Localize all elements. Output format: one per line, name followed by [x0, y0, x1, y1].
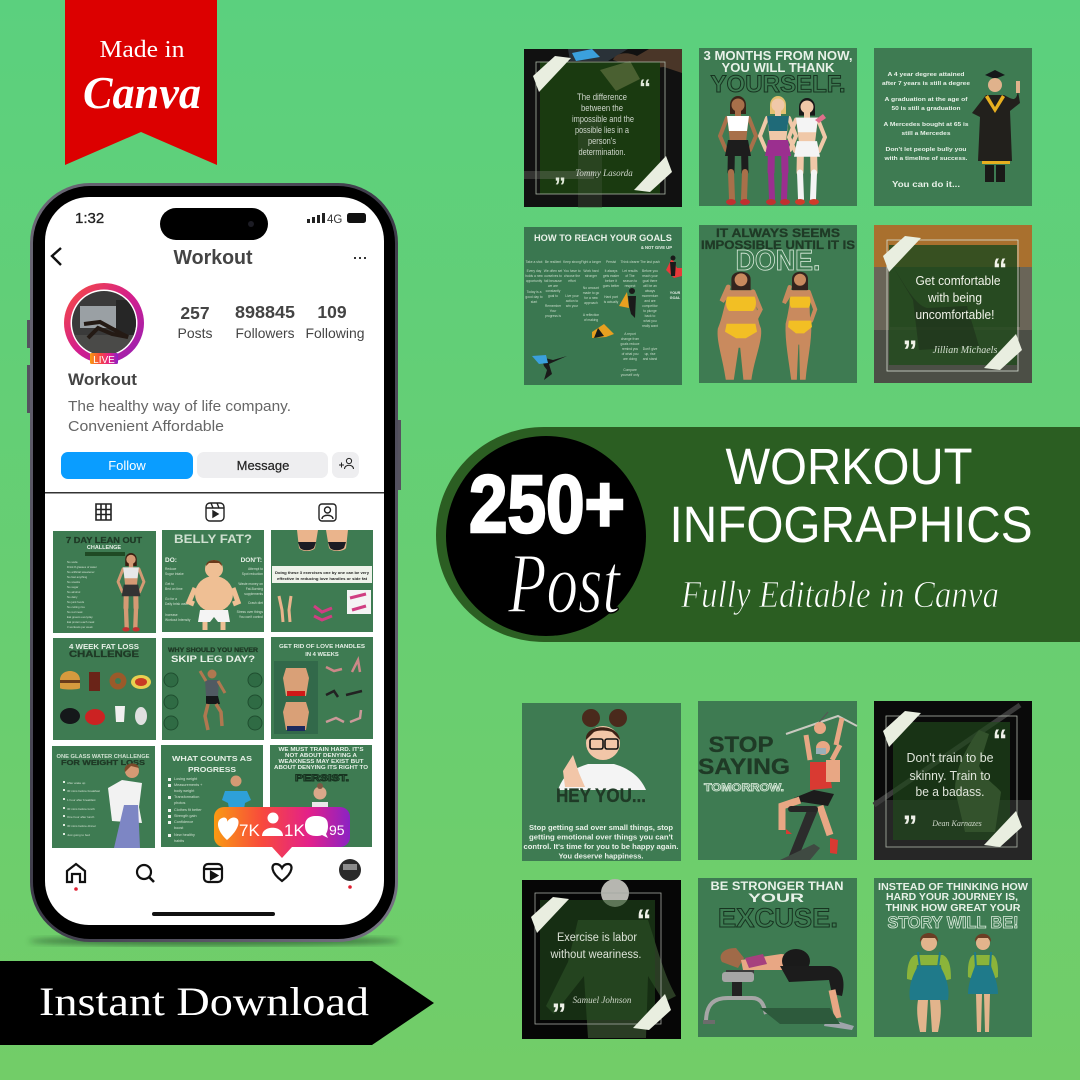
phone mockup	[27, 183, 401, 946]
post: 7 day lean out: No junk foods	[67, 600, 85, 604]
tile: get comfortable: uncomfortable!	[916, 307, 994, 322]
tile: stop saying tomorrow: SAYING	[698, 754, 790, 779]
tile: graduate timeline	[874, 48, 1032, 206]
post: love handles: GET RID OF LOVE HANDLES	[279, 644, 365, 650]
post: belly fat: Stress over things	[237, 610, 263, 614]
status bar: 4G	[327, 214, 342, 226]
tile: how to reach your goals: A reflection	[583, 313, 599, 317]
tile: how to reach your goals: Today is a	[527, 290, 542, 294]
tile: how to reach your goals: constantly	[546, 289, 561, 293]
tile: instead of thinking: HARD YOUR JOURNEY IS,	[886, 891, 1018, 903]
post: 7 day lean out: No alcohol	[67, 590, 81, 594]
tile: how to reach your goals: opportunity	[526, 279, 543, 283]
post: love handles exercises	[271, 530, 373, 632]
post: skip leg day: WHY SHOULD YOU NEVER	[168, 648, 259, 654]
post: 7 day lean out: CHALLENGE	[87, 545, 121, 551]
tile: how to reach your goals: Compare	[623, 368, 637, 372]
post: train hard: NOT ABOUT DENYING A	[285, 753, 358, 759]
icon: comment	[305, 816, 328, 838]
tile: 3 months from now	[699, 48, 857, 206]
stats: Followers	[236, 325, 294, 341]
status bar	[75, 208, 366, 240]
tile: how to reach your goals: gets easier	[603, 274, 620, 278]
stats	[177, 302, 364, 341]
tile: how to reach your goals: Be resilient	[545, 260, 561, 264]
tile: how to reach your goals: Fight a longer	[581, 260, 602, 264]
tile: graduate timeline: Don't let people bully you	[886, 147, 967, 153]
avatar with live badge: LIVE	[93, 355, 115, 366]
tile: how to reach your goals: Let results	[622, 269, 638, 273]
post: water challenge: FOR WEIGHT LOSS	[61, 758, 145, 767]
tile: how to reach your goals: always	[645, 289, 655, 293]
post: belly fat: Go for a	[165, 597, 177, 601]
tile: be stronger than your excuse: YOUR	[748, 891, 805, 905]
tile: hey you	[522, 703, 681, 861]
post: belly fat: BELLY FAT?	[174, 532, 252, 546]
bio: Workout	[68, 370, 137, 389]
ribbon: made in canva: Made in	[100, 37, 184, 63]
post: what counts as progress: Losing weight	[174, 777, 198, 781]
badge: 250+ post: 250+	[469, 459, 625, 550]
tile: instead of thinking: STORY WILL BE!	[888, 913, 1018, 932]
tile: the difference quote	[524, 49, 682, 208]
tile: how to reach your goals: Hard part	[604, 295, 618, 299]
tile: get comfortable: with being	[927, 290, 982, 305]
tile: how to reach your goals: for a new	[584, 296, 598, 300]
stats: 257	[180, 303, 210, 323]
tile: it always seems impossible	[699, 225, 857, 383]
notification badge: 95	[329, 822, 345, 838]
icon: search	[137, 865, 154, 882]
tile: how to reach your goals: & NOT GIVE UP	[641, 245, 672, 250]
tile: get comfortable: Get comfortable	[916, 273, 1000, 288]
tile: stop saying tomorrow	[698, 701, 857, 860]
tile: how to reach your goals	[524, 227, 682, 385]
post: what counts as progress: Confidence	[174, 820, 193, 824]
tile: get comfortable	[874, 225, 1032, 383]
post: skip leg day	[162, 638, 264, 740]
post: water challenge: 1 hour after breakfast	[67, 798, 96, 802]
tile: exercise is labor: Exercise is labor	[557, 932, 637, 944]
post: belly fat: Bed on time	[165, 587, 183, 591]
post: 7 day lean out: No snacks	[67, 580, 81, 584]
banner: instant download arrow	[0, 961, 434, 1045]
post: belly fat: Attempt to	[248, 567, 263, 571]
tile: graduate timeline: with a timeline of success.	[883, 156, 968, 162]
post: belly fat: DON'T:	[241, 557, 262, 564]
bottom nav	[67, 859, 361, 882]
stats: Following	[306, 325, 364, 341]
icon: heart nav	[272, 864, 292, 881]
post: 7 day lean out: Eat protein each meal	[67, 620, 95, 624]
post: 7 day lean out: 3 workouts per week	[67, 625, 93, 629]
post: what counts as progress: Measurements +	[174, 783, 203, 787]
tile: how to reach your goals: Take a shot	[526, 260, 543, 264]
post: 7 day lean out: No dairy	[67, 595, 78, 599]
post: what counts as progress: Transformation	[174, 795, 199, 799]
post: train hard: PERSIST.	[295, 773, 349, 784]
tile: how to reach your goals: Persist	[606, 260, 616, 264]
buttons	[61, 452, 359, 479]
tile: how to reach your goals: action to	[566, 299, 578, 303]
tile: how to reach your goals: remind you	[622, 347, 638, 351]
tile: how to reach your goals: reach your	[642, 274, 659, 278]
profile header: Workout	[174, 247, 253, 269]
tile: the difference quote: ”	[554, 173, 566, 200]
tile: how to reach your goals: Live your	[565, 294, 580, 298]
tile: graduate timeline: still a Mercedes	[902, 131, 950, 137]
tile: the difference quote: “	[639, 75, 651, 102]
tile: how to reach your goals: effort	[568, 279, 576, 283]
post: what counts as progress: body weight	[174, 789, 195, 793]
post: what counts as progress: photos	[174, 801, 186, 805]
tile: how to reach your goals: Work hard	[583, 269, 599, 273]
icon: person	[262, 812, 283, 836]
tile: how to reach your goals: choose the	[564, 274, 580, 278]
badge: 250+ post	[446, 436, 646, 636]
post: 7 day lean out: No sugar	[67, 585, 78, 589]
profile header	[52, 247, 366, 269]
tile: how to reach your goals: ourselves to	[544, 274, 562, 278]
tile: how to reach your goals: is actually	[604, 300, 619, 304]
tile: it always seems impossible: IT ALWAYS SEEMS	[716, 226, 840, 240]
tile: how to reach your goals: yourself only	[621, 373, 640, 377]
post: 7 day lean out	[53, 531, 156, 633]
icon: home	[67, 864, 85, 882]
tile: graduate timeline: You can do it...	[892, 180, 960, 189]
tile: instead of thinking: THINK HOW GREAT YOUR	[886, 902, 1021, 914]
tile: exercise is labor: without weariness.	[550, 949, 642, 961]
tile: how to reach your goals: competitor	[642, 304, 659, 308]
tile: how to reach your goals: We often set	[544, 269, 562, 273]
post tile group: bottom	[522, 701, 1032, 1039]
post: 7 day lean out: No red meat	[67, 610, 83, 614]
tile: 3 months from now: 3 MONTHS FROM NOW,	[704, 48, 852, 63]
post: water challenge: Just going to bed	[67, 833, 90, 837]
tile: how to reach your goals: Keep strong	[563, 260, 581, 264]
tile: how to reach your goals: progress is	[545, 314, 561, 318]
tile: how to reach your goals: momentum	[642, 294, 658, 298]
buttons: Follow	[108, 458, 146, 473]
tile: the difference quote: person's	[588, 136, 616, 147]
tile: get comfortable: “	[992, 253, 1008, 286]
post: what counts as progress: New healthy	[174, 833, 195, 837]
tile: how to reach your goals: holds a new	[525, 274, 543, 278]
post: belly fat: Increase	[165, 613, 178, 617]
tile: hey you: HEY YOU...	[556, 786, 646, 807]
post: what counts as progress: WHAT COUNTS AS	[172, 754, 252, 763]
post: belly fat: DO:	[165, 557, 177, 564]
tile: how to reach your goals: what you	[643, 319, 657, 323]
tile: how to reach your goals: up, rise	[645, 352, 656, 356]
post: belly fat: Spot reduction	[242, 572, 263, 576]
tile: don't train to be skinny: ”	[902, 810, 918, 843]
post: love handles	[271, 637, 373, 739]
tile: how to reach your goals: Your	[550, 309, 557, 313]
post: water challenge: 30 mins before lunch	[67, 807, 95, 811]
tile: hey you: getting emotional over things you can't	[529, 834, 674, 842]
tile: how to reach your goals: made to go	[583, 291, 599, 295]
post: 4 week fat loss	[53, 638, 156, 740]
tile: how to reach your goals: will be an	[643, 284, 657, 288]
post: water challenge: ONE GLASS WATER CHALLENGE	[56, 754, 150, 760]
tile: how to reach your goals: start	[531, 300, 537, 304]
phone post grid	[52, 530, 373, 848]
tile: how to reach your goals: HOW TO REACH YOUR GOALS	[534, 233, 672, 243]
tile: how to reach your goals: Before you	[642, 269, 658, 273]
tile: how to reach your goals: The last push	[640, 260, 660, 264]
tile: how to reach your goals: approach	[584, 301, 598, 305]
tile: 3 months from now: YOURSELF.	[710, 71, 846, 98]
post: what counts as progress	[161, 745, 263, 847]
notification badge	[214, 807, 350, 858]
tile: graduate timeline: A graduation at the age of	[884, 97, 968, 103]
tile: it always seems impossible: DONE.	[736, 245, 820, 277]
post: 7 day lean out: No artificial sweetener	[67, 570, 95, 574]
tile: be stronger than your excuse: BE STRONGER THAN	[710, 879, 844, 893]
tile: how to reach your goals: respect	[625, 284, 635, 288]
tile: how to reach your goals: No amount	[583, 286, 599, 290]
tile: 3 months from now: YOU WILL THANK	[722, 60, 835, 75]
post: water challenge	[52, 746, 155, 848]
tile: how to reach your goals: good day to	[525, 295, 543, 299]
icon: reels	[204, 864, 222, 882]
post: water challenge: 30 mins before breakfast	[67, 789, 100, 793]
post: skip leg day: SKIP LEG DAY?	[171, 654, 255, 665]
tile: graduate timeline: 50 is still a graduation	[892, 106, 961, 112]
stats: 109	[317, 302, 347, 322]
tile: how to reach your goals: are doing	[623, 357, 637, 361]
post: belly fat: Waste money on	[238, 582, 263, 586]
divider	[45, 492, 384, 494]
post: what counts as progress: PROGRESS	[188, 765, 236, 774]
tile: hey you: Stop getting sad over small things, stop	[529, 825, 673, 832]
post: belly fat	[162, 530, 264, 632]
tile: how to reach your goals: It always	[605, 269, 618, 273]
tile: get comfortable: Jillian Michaels	[933, 345, 997, 356]
tile: exercise is labor: Samuel Johnson	[573, 995, 632, 1005]
tile: get comfortable: ”	[902, 335, 918, 368]
post: belly fat: Daily brisk walk	[165, 602, 188, 606]
post: belly fat: Get to	[165, 582, 174, 586]
tile: how to reach your goals: goal there	[643, 279, 657, 283]
heading: workout infographics: INFOGRAPHICS	[670, 496, 1032, 553]
tile: how to reach your goals: of The	[625, 274, 635, 278]
tile: don't train to be skinny: skinny. Train to	[910, 768, 990, 783]
post: love handles exercises: effective in reducing love handles or side fat	[277, 576, 368, 581]
banner: instant download arrow: Instant Download	[39, 979, 369, 1024]
icon: profile avatar	[339, 859, 361, 881]
tile: how to reach your goals: of what you	[622, 352, 639, 356]
post: what counts as progress: Strength gain	[174, 814, 197, 818]
post: belly fat: Fat-Burning	[246, 587, 263, 591]
tile: hey you: control. It's time for you to be happy again.	[524, 844, 679, 851]
tile: how to reach your goals: season to	[623, 279, 637, 283]
tile: the difference quote: Tommy Lasorda	[575, 168, 633, 178]
ribbon: made in canva	[65, 0, 217, 165]
tile: graduate timeline: A 4 year degree attained	[888, 72, 965, 78]
post: 7 day lean out: No fast anything	[67, 575, 88, 579]
avatar with live badge	[64, 283, 144, 366]
post: train hard: ABOUT DENYING ITS RIGHT TO	[274, 765, 369, 771]
tile: how to reach your goals: before it	[605, 279, 617, 283]
tile: the difference quote: impossible and the	[572, 114, 634, 125]
post: train hard: WE MUST TRAIN HARD. IT'S	[278, 747, 364, 753]
tile: how to reach your goals: back to	[645, 314, 655, 318]
notification badge: 1K	[284, 821, 305, 840]
post: 4 week fat loss: CHALLENGE	[69, 649, 139, 659]
home bar	[152, 912, 275, 916]
tile: stop saying tomorrow: STOP	[708, 732, 774, 757]
stats: 898845	[235, 302, 295, 322]
subheading: fully editable: Fully Editable in Canva	[680, 574, 999, 616]
post: train hard: WEAKNESS MAY EXIST BUT	[278, 759, 364, 765]
tile: how to reach your goals: we are	[548, 284, 558, 288]
tile: how to reach your goals: Think clearer	[620, 260, 640, 264]
post: water challenge: One hour after lunch	[67, 815, 95, 819]
tile: graduate timeline: A Mercedes bought at 65 is	[884, 122, 968, 128]
tab icons	[96, 503, 336, 521]
post: train hard	[270, 745, 372, 847]
post: what counts as progress: boost	[174, 826, 184, 830]
icon: heart	[218, 817, 239, 840]
badge: 250+ post: Post	[507, 535, 622, 631]
tile: instead of thinking: INSTEAD OF THINKING HOW	[878, 881, 1028, 893]
tile: it always seems impossible: IMPOSSIBLE UNTIL IT IS	[701, 238, 855, 252]
heading: workout infographics: WORKOUT	[726, 438, 972, 495]
tile: exercise is labor	[522, 879, 681, 1039]
post: 7 day lean out: 7 DAY LEAN OUT	[66, 536, 142, 545]
tile: exercise is labor: ”	[552, 998, 566, 1031]
tile: don't train to be skinny: Don't train to be	[906, 750, 994, 765]
tile: don't train to be skinny: “	[992, 724, 1008, 757]
tile: be stronger than your excuse: EXCUSE.	[718, 903, 838, 933]
tile: the difference quote: possible lies in a	[575, 125, 630, 136]
tile: how to reach your goals: and are	[644, 299, 656, 303]
post: love handles: IN 4 WEEKS	[305, 652, 339, 658]
post: 7 day lean out: No soda	[67, 560, 78, 564]
post: belly fat: Workout Intensity	[165, 618, 191, 622]
tile: exercise is labor: “	[636, 904, 652, 937]
tile: instead of thinking	[874, 878, 1032, 1037]
post: water challenge: 30 mins before dinner	[67, 824, 96, 828]
tile: the difference quote: The difference	[577, 92, 627, 103]
status bar: 1:32	[75, 210, 104, 227]
tile: hey you: You deserve happiness.	[558, 854, 644, 860]
notification badge: 7K	[239, 821, 260, 840]
tile: the difference quote: determination.	[578, 147, 626, 158]
ribbon: made in canva: Canva	[83, 67, 201, 118]
tile: how to reach your goals: and stand	[643, 357, 657, 361]
tile: how to reach your goals: win your	[566, 304, 579, 308]
tile: how to reach your goals: change from	[621, 337, 639, 341]
tile: how to reach your goals: Remember	[545, 304, 562, 308]
buttons: Message	[237, 458, 289, 473]
tile: how to reach your goals: to plunge	[643, 309, 657, 313]
post: 7 day lean out: Eat greens everyday	[67, 615, 93, 619]
post: 7 day lean out: Drink 8 glasses of water	[67, 565, 97, 569]
tile: how to reach your goals: Every day	[527, 269, 542, 273]
post: belly fat: Sugar Intake	[165, 572, 184, 576]
tile: how to reach your goals: YOUR	[670, 291, 681, 295]
tile: how to reach your goals: goal to	[548, 294, 558, 298]
post: love handles exercises: Doing these 3 exercises one by one can be very	[275, 570, 370, 575]
tile: how to reach your goals: fail because	[544, 279, 562, 283]
post: 7 day lean out: No cutting rice	[67, 605, 85, 609]
tile: don't train to be skinny: Dean Karnazes	[931, 819, 982, 828]
tile: how to reach your goals: A report	[624, 332, 636, 336]
post tile group: top	[524, 48, 1032, 385]
stats: Posts	[177, 325, 213, 341]
tile: don't train to be skinny	[874, 701, 1032, 860]
bio: Convenient Affordable	[68, 419, 224, 435]
tile: how to reach your goals: goals reduce	[621, 342, 640, 346]
tile: graduate timeline: after 7 years is still a degree	[882, 81, 971, 87]
tile: how to reach your goals: stronger	[585, 274, 598, 278]
post: belly fat: Crash diet	[248, 601, 263, 605]
tile: the difference quote: between the	[581, 103, 623, 114]
title banner	[436, 427, 1080, 642]
post: belly fat: Reduce	[165, 567, 177, 571]
tile: how to reach your goals: Don't give	[643, 347, 657, 351]
tile: be stronger than your excuse	[698, 878, 857, 1037]
bio: The healthy way of life company.	[68, 399, 291, 415]
bio	[68, 370, 291, 435]
tile: how to reach your goals: of making	[584, 318, 598, 322]
tile: how to reach your goals: You have to	[563, 269, 581, 273]
tile: how to reach your goals: goes better	[603, 284, 620, 288]
tile: how to reach your goals: really want	[642, 324, 658, 328]
tile: how to reach your goals: GOAL	[670, 296, 681, 300]
post: what counts as progress: Clothes fit better	[174, 808, 202, 812]
tile: stop saying tomorrow: TOMORROW.	[704, 782, 784, 794]
post: belly fat: supplements	[244, 592, 263, 596]
post: 4 week fat loss: 4 WEEK FAT LOSS	[69, 644, 139, 651]
post: what counts as progress: habits	[174, 839, 184, 843]
tile: don't train to be skinny: be a badass.	[916, 784, 984, 799]
heading: workout infographics	[670, 438, 1032, 553]
post: belly fat: You can't control	[239, 615, 263, 619]
post: water challenge: After wake up	[67, 781, 86, 785]
